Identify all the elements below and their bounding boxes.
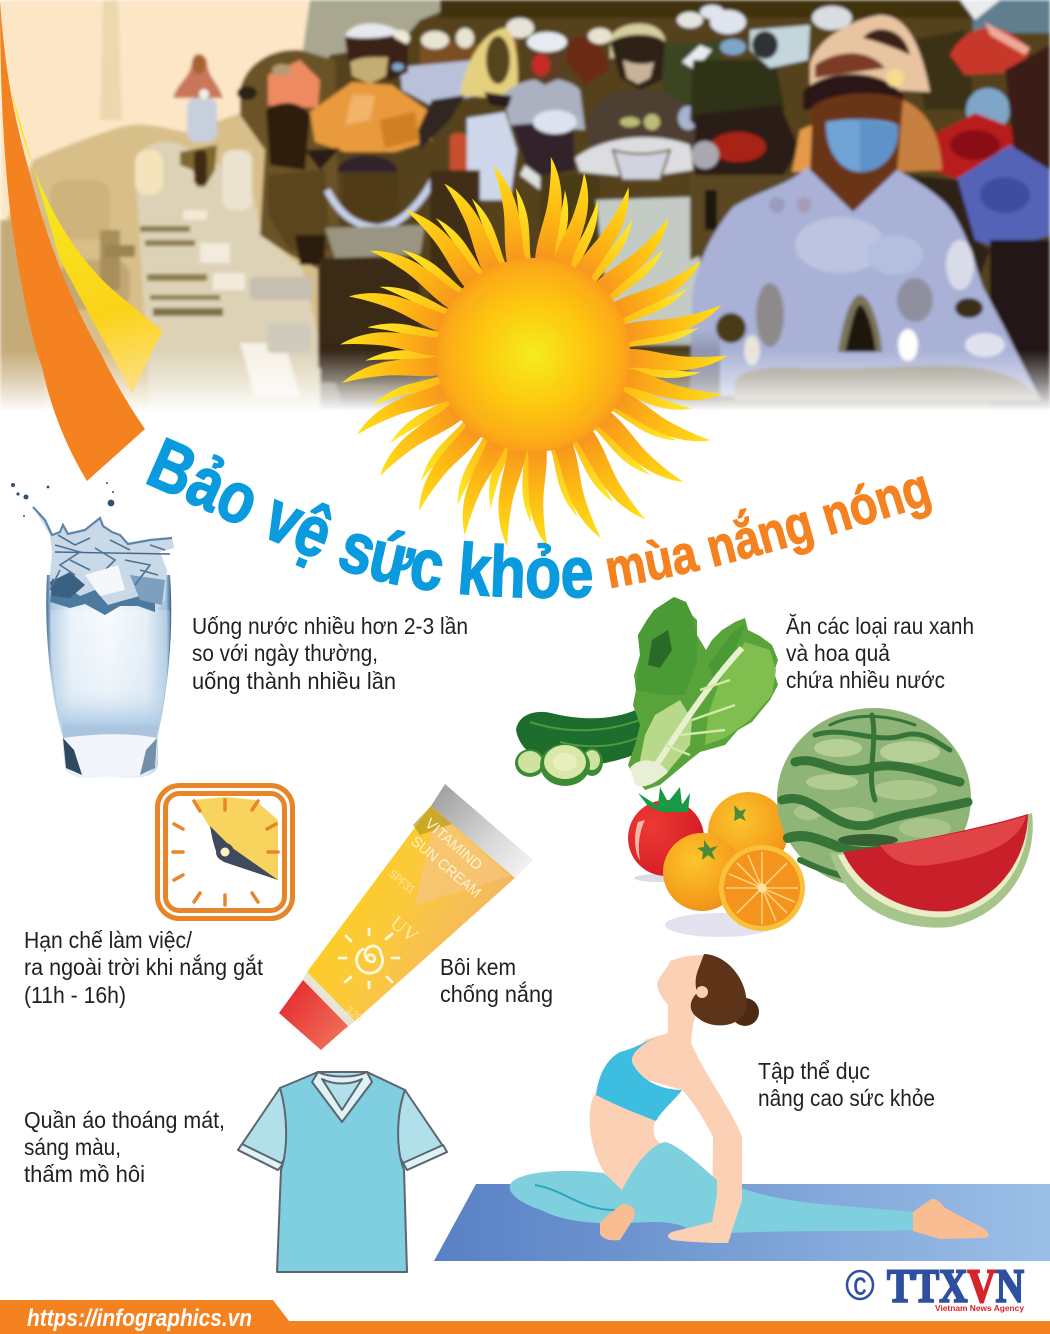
text: eat vegetables and fruit bbox=[786, 613, 974, 693]
icon: sunscreen tube: 120 bbox=[344, 1005, 364, 1024]
hair and bun bbox=[691, 954, 759, 1026]
tomato bbox=[628, 787, 704, 882]
website url: https://infographics.vn bbox=[27, 1305, 252, 1332]
back arm, shoulder and neck skin bbox=[630, 1005, 742, 1243]
icon: sunscreen tube bbox=[279, 784, 533, 1050]
text: drink water: Uống nước nhiều hơn 2-3 lần bbox=[192, 613, 468, 639]
icon: clock bbox=[158, 786, 292, 918]
cucumber bbox=[515, 708, 653, 786]
title bbox=[146, 437, 932, 599]
logo: TTXVN: TTXVN bbox=[887, 1260, 1024, 1313]
logo: TTXVN: C bbox=[854, 1273, 866, 1301]
small distant rider bbox=[173, 54, 223, 187]
icon: sunscreen tube: SPF31 bbox=[386, 867, 418, 897]
text: drink water: uống thành nhiều lần bbox=[192, 668, 396, 694]
rider on white scooter bbox=[575, 24, 730, 385]
text: limit outdoor work: Hạn chế làm việc/ bbox=[24, 927, 193, 953]
text: limit outdoor work: (11h - 16h) bbox=[24, 982, 126, 1008]
posterized photo content bbox=[0, 0, 1050, 410]
oranges bbox=[663, 792, 805, 937]
belly bbox=[590, 1092, 664, 1195]
icon: sunscreen tube: UV bbox=[386, 912, 422, 948]
text: limit outdoor work bbox=[24, 927, 264, 1008]
text: apply sunscreen bbox=[440, 954, 553, 1007]
lettuce bbox=[628, 597, 778, 790]
icon: sunscreen tube: SUN CREAM bbox=[407, 833, 484, 901]
orange and yellow ribbon bbox=[0, 0, 163, 481]
text: clothing: sáng màu, bbox=[24, 1134, 121, 1160]
white fade at the bottom of the photo bbox=[0, 350, 1050, 412]
text: clothing: Quần áo thoáng mát, bbox=[24, 1107, 225, 1133]
text: drink water bbox=[192, 613, 468, 694]
white cover under the photo bbox=[0, 411, 1050, 427]
main rider with blue mask bbox=[690, 15, 1040, 400]
road scene background bbox=[0, 0, 1050, 410]
sun long rays bbox=[340, 157, 728, 548]
water droplets bbox=[11, 482, 114, 517]
left crowd bbox=[237, 50, 340, 368]
feet bbox=[600, 1204, 635, 1240]
text: apply sunscreen: Bôi kem bbox=[440, 954, 516, 980]
icon: t-shirt bbox=[238, 1072, 447, 1272]
title: mùa nắng nóng: mùa nắng nóng bbox=[606, 476, 932, 588]
text: exercise: nâng cao sức khỏe bbox=[758, 1085, 935, 1111]
icon: glass of water bbox=[11, 482, 174, 778]
yoga mat bbox=[434, 1184, 1050, 1261]
sun bbox=[340, 157, 728, 548]
watermelon slice bbox=[830, 813, 1033, 928]
hero photo: motorbike riders in traffic bbox=[0, 0, 1050, 427]
footer bar with website bbox=[0, 1300, 1050, 1334]
title: Bảo vệ sức khỏe: Bảo vệ sức khỏe bbox=[146, 437, 592, 599]
dark lower shadow of crowd bbox=[320, 330, 720, 410]
sports top bbox=[596, 1033, 682, 1121]
text: eat vegetables and fruit: Ăn các loại rau xanh bbox=[786, 613, 974, 639]
riders behind the main rider bbox=[690, 0, 1050, 410]
water splash bbox=[33, 507, 174, 615]
rider in orange shirt bbox=[305, 23, 465, 383]
text: apply sunscreen: chống nắng bbox=[440, 981, 553, 1007]
icon: sunscreen tube: VITAMIND bbox=[421, 815, 485, 874]
yellow ribbon fold bbox=[12, 93, 163, 393]
text: exercise bbox=[758, 1058, 935, 1111]
sun disc bbox=[436, 258, 630, 452]
text: limit outdoor work: ra ngoài trời khi nắng gắt bbox=[24, 954, 264, 980]
text: eat vegetables and fruit: và hoa quả bbox=[786, 640, 890, 666]
text: clothing bbox=[24, 1107, 225, 1187]
whole watermelon bbox=[777, 708, 971, 888]
middle crowd riders bbox=[430, 28, 600, 390]
icon: vegetables and fruit bbox=[515, 597, 1033, 937]
head bbox=[657, 955, 712, 1012]
orange ribbon fold bbox=[0, 0, 145, 481]
arm over leggings bbox=[668, 1137, 742, 1243]
text: drink water: so với ngày thường, bbox=[192, 640, 378, 666]
icon: woman doing yoga bbox=[510, 954, 988, 1243]
text: clothing: thấm mồ hôi bbox=[24, 1161, 145, 1187]
teal leggings bbox=[510, 1142, 913, 1233]
logo: TTXVN: Vietnam News Agency bbox=[935, 1303, 1024, 1313]
text: exercise: Tập thể dục bbox=[758, 1058, 870, 1084]
text: eat vegetables and fruit: chứa nhiều nước bbox=[786, 667, 945, 693]
back row of helmets bbox=[390, 5, 724, 120]
sun short rays bbox=[365, 187, 701, 523]
